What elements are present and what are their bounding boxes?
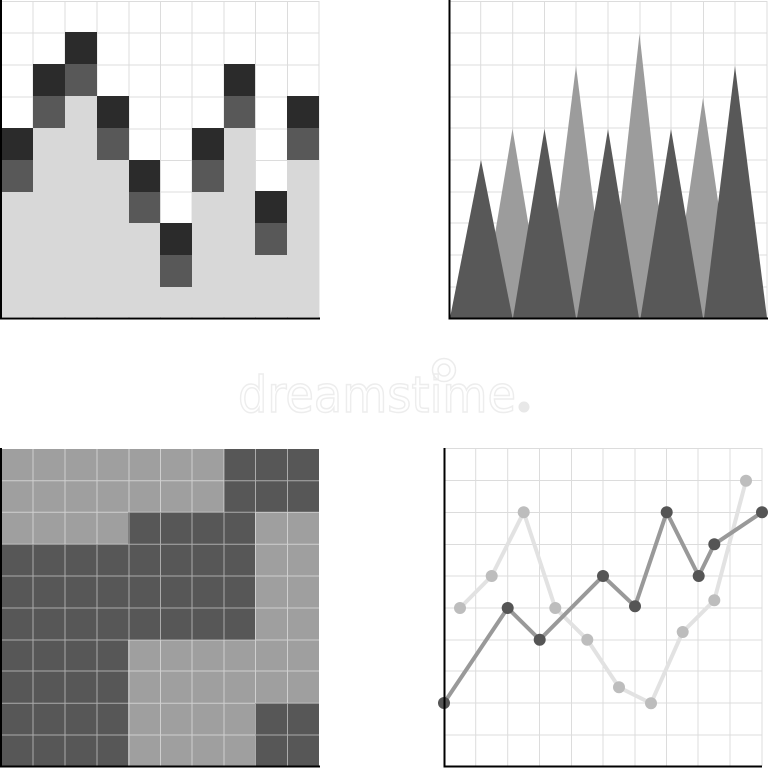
panel: overlapping triangles chart <box>449 0 768 320</box>
white grid lines <box>1 449 319 766</box>
light line series <box>454 475 752 709</box>
panel: dual line chart <box>438 448 768 768</box>
dark blocks <box>2 32 319 255</box>
axes <box>0 448 320 768</box>
light triangles <box>481 34 735 318</box>
dark line series <box>438 506 768 709</box>
dark regions <box>1 449 319 766</box>
grey area fill <box>2 96 319 317</box>
mid-grey blocks <box>2 64 319 287</box>
axes <box>0 0 320 320</box>
axes <box>444 448 762 768</box>
watermark: dreamstime <box>238 366 516 424</box>
dark triangles <box>450 66 767 318</box>
panel: two-tone heat grid <box>0 448 320 768</box>
axes <box>449 0 768 320</box>
panel: stepped block chart <box>0 0 320 320</box>
